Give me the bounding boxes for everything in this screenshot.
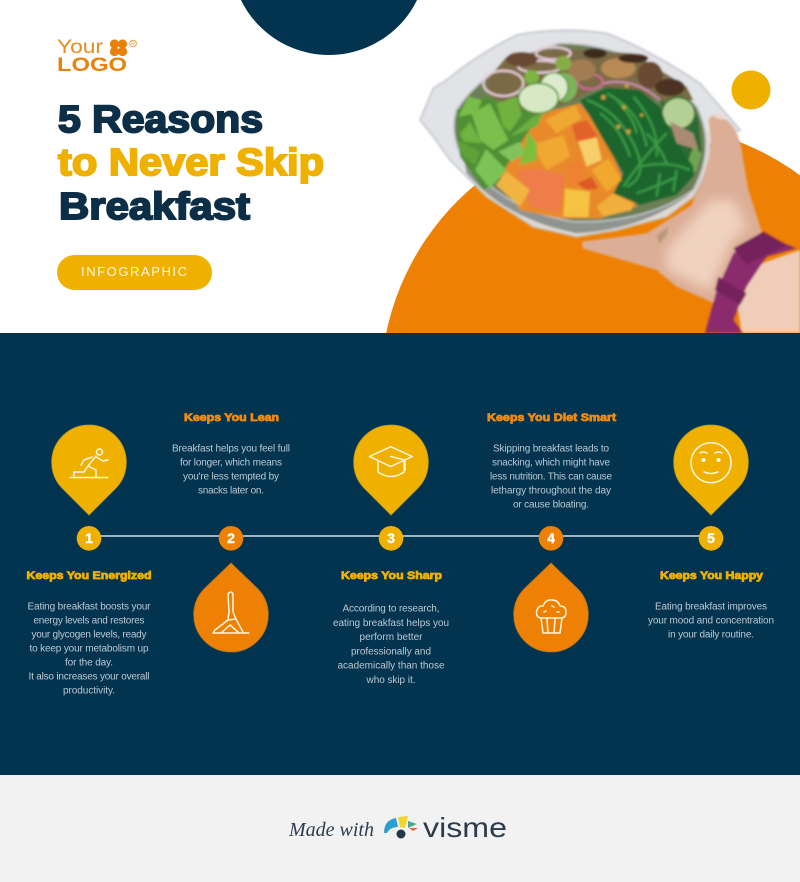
title: 5 Reasons (58, 99, 263, 141)
text 1: for the day. (65, 658, 113, 668)
badge: infographic: INFOGRAPHIC (81, 264, 187, 279)
number 5: 5 (707, 530, 715, 546)
text 1: energy levels and restores (34, 616, 144, 626)
text 5: your mood and concentration (648, 616, 774, 626)
text 3 (333, 604, 449, 686)
number 3: 3 (387, 530, 395, 546)
text 3: academically than those (338, 660, 445, 672)
step 4: keeps you diet smart (487, 412, 616, 652)
title: Breakfast (59, 186, 250, 228)
text 1: Eating breakfast boosts your (28, 602, 151, 612)
pin 5 (674, 425, 748, 515)
text 3: perform better (360, 632, 423, 643)
heading 2: Keeps You Lean (184, 412, 279, 424)
text 2: you're less tempted by (183, 472, 279, 482)
heading 1: Keeps You Energized (26, 570, 152, 582)
number 5 (699, 526, 723, 551)
text 4: or cause bloating. (513, 500, 589, 510)
snap peas (457, 97, 543, 188)
seaweed (580, 84, 693, 205)
drop 2 (194, 563, 268, 652)
logo: R (131, 42, 135, 48)
heading 3: Keeps You Sharp (341, 570, 442, 582)
step 2: keeps you lean (172, 412, 290, 652)
cucumbers (518, 73, 702, 183)
text 4 (490, 444, 612, 510)
text 4: snacking, which might have (492, 458, 610, 468)
number 3 (379, 526, 403, 551)
number 4 (539, 526, 563, 551)
title: to Never Skip (58, 142, 324, 184)
text 3: who skip it. (366, 675, 416, 686)
text 2: for longer, which means (180, 458, 282, 468)
text 1 (28, 602, 151, 696)
number 1 (77, 526, 101, 551)
panel: footer (0, 775, 800, 882)
text 4: Skipping breakfast leads to (493, 444, 609, 454)
step 1: keeps you energized (26, 425, 152, 696)
text 5: in your daily routine. (668, 630, 754, 640)
text 4: less nutrition. This can cause (490, 472, 612, 482)
visme wordmark: visme (423, 812, 507, 843)
text 1: productivity. (63, 686, 115, 696)
timeline line (89, 535, 711, 537)
badge: infographic (57, 255, 212, 290)
text 2 (172, 444, 290, 496)
pin 1 (52, 425, 126, 515)
number 2 (219, 526, 243, 551)
logo: LOGO (57, 55, 127, 76)
heading 5: Keeps You Happy (660, 570, 764, 582)
text 4: lethargy throughout the day (491, 486, 611, 496)
panel: header (57, 0, 800, 333)
text 3: eating breakfast helps you (333, 618, 449, 629)
hand back layer (580, 204, 692, 282)
bowl shell (420, 30, 740, 237)
heading 4: Keeps You Diet Smart (487, 412, 616, 424)
navy circle (231, 0, 427, 55)
text 5: Eating breakfast improves (655, 602, 767, 612)
arm (733, 250, 800, 333)
number 4: 4 (547, 530, 555, 546)
number 1: 1 (85, 530, 93, 546)
gold circle (732, 70, 770, 110)
text 3: According to research, (342, 604, 440, 614)
icon: visme logo (384, 816, 418, 838)
icon: yoga pose (213, 592, 249, 633)
step 5: keeps you happy (648, 425, 774, 640)
food base patches (457, 48, 702, 218)
number 2: 2 (227, 530, 235, 546)
orange circle (386, 132, 800, 333)
logo (57, 37, 136, 76)
text 2: Breakfast helps you feel full (172, 444, 290, 454)
text 5 (648, 602, 774, 640)
onions (483, 47, 660, 100)
text 2: snacks later on. (198, 486, 264, 496)
text 1: to keep your metabolism up (30, 644, 149, 654)
watch strap (705, 232, 797, 333)
icon: runner (70, 449, 108, 478)
panel: timeline section (0, 333, 800, 775)
photo: hand holding bowl (420, 30, 800, 333)
icon: smiley (691, 443, 731, 483)
pin 3 (354, 425, 428, 515)
text 1: your glycogen levels, ready (32, 630, 146, 640)
made with text: Made with (288, 819, 374, 841)
logo: Your (57, 37, 104, 58)
title (58, 99, 324, 228)
drop 4 (514, 563, 588, 652)
icon: muffin (536, 600, 566, 633)
text 1: It also increases your overall (28, 672, 150, 682)
icon: graduation cap (370, 447, 412, 476)
fruit cubes (496, 105, 633, 217)
mushrooms (506, 48, 685, 96)
hand (656, 114, 750, 292)
step 3: keeps you sharp (333, 425, 449, 686)
text 3: professionally and (351, 646, 431, 658)
